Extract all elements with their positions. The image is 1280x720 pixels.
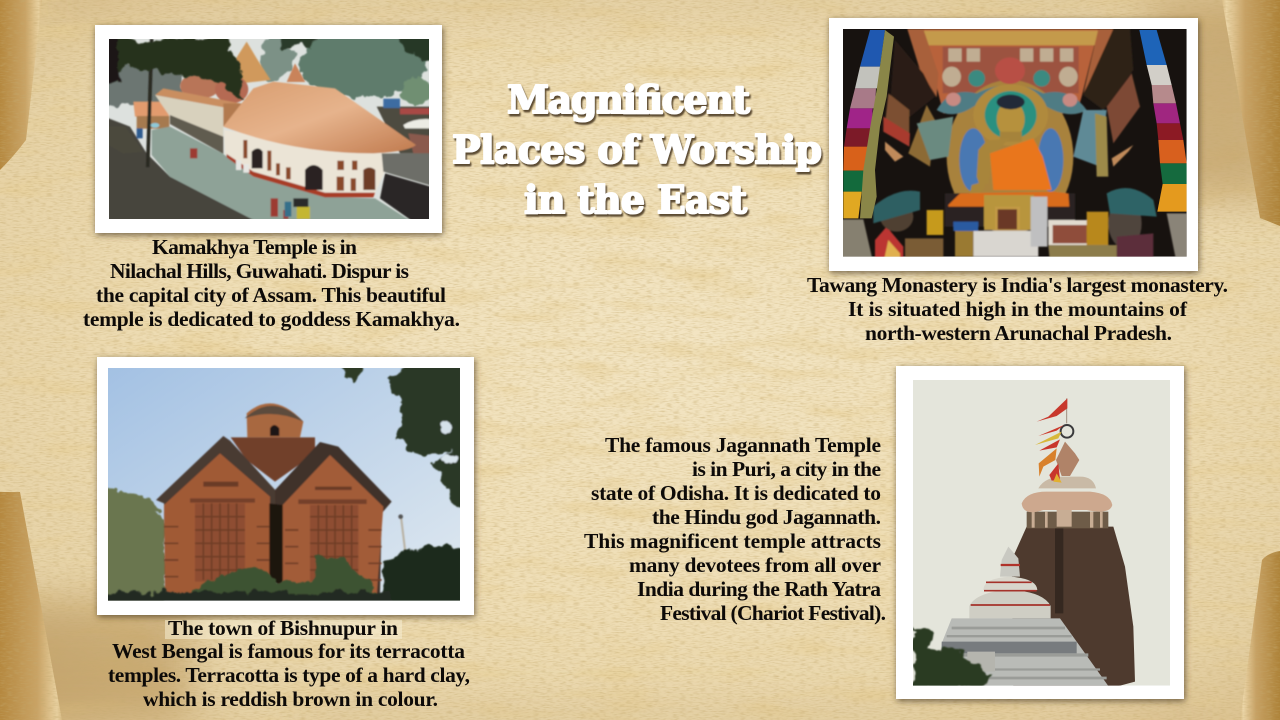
panel: Jagannath Temple <box>584 366 1184 699</box>
scroll curl: top left <box>0 0 42 170</box>
right prayer banner <box>1139 30 1187 212</box>
scroll curl: bottom left <box>0 492 62 720</box>
caption: Jagannath Temple: India during the Rath Yatra <box>637 577 881 601</box>
white temple spire <box>940 547 1110 688</box>
title <box>452 77 822 222</box>
caption: Tawang Monastery: Tawang Monastery is India's largest monastery. <box>807 273 1228 297</box>
photo: Jagannath Temple <box>913 380 1170 688</box>
photo frame: Bishnupur <box>97 357 474 615</box>
caption: Tawang Monastery: It is situated high in the mountains of <box>848 297 1188 321</box>
caption: Jagannath Temple: is in Puri, a city in the <box>692 457 881 481</box>
photo: Bishnupur temple <box>100 363 467 610</box>
caption: Kamakhya Temple: the capital city of Assam. This beautiful <box>96 283 446 307</box>
photo frame: Kamakhya Temple <box>95 25 442 233</box>
scroll curl: bottom right <box>1240 551 1280 720</box>
left prayer banner <box>843 30 894 218</box>
caption: Bishnupur <box>108 616 470 711</box>
title: Magnificent <box>507 77 750 122</box>
caption: Bishnupur: West Bengal is famous for its terracotta <box>112 639 465 663</box>
scroll curl: top right <box>1222 0 1280 226</box>
caption: Jagannath Temple: state of Odisha. It is dedicated to <box>591 481 881 505</box>
photo frame: Jagannath Temple <box>896 366 1184 699</box>
caption: Jagannath Temple: The famous Jagannath Temple <box>605 433 881 457</box>
caption: Bishnupur: temples. Terracotta is type of a hard clay, <box>108 663 470 687</box>
caption: Bishnupur: which is reddish brown in colour. <box>143 687 438 711</box>
caption: Kamakhya Temple: temple is dedicated to goddess Kamakhya. <box>83 307 460 331</box>
caption: Tawang Monastery: north-western Arunachal Pradesh. <box>865 321 1172 345</box>
caption: Jagannath Temple: This magnificent temple attracts <box>584 529 881 553</box>
photo frame: Tawang Monastery <box>829 18 1198 271</box>
caption: Jagannath Temple: the Hindu god Jagannath. <box>652 505 881 529</box>
caption highlight: first line backdrop <box>165 620 402 639</box>
photo: Tawang Monastery <box>837 29 1193 263</box>
caption: Kamakhya Temple <box>83 235 460 331</box>
title: Places of Worship <box>452 127 822 172</box>
caption: Jagannath Temple <box>584 433 886 625</box>
photo: Kamakhya Temple <box>109 39 429 219</box>
panel: Tawang Monastery <box>807 18 1228 345</box>
panel: Kamakhya Temple <box>83 25 460 331</box>
caption: Jagannath Temple: many devotees from all over <box>629 553 881 577</box>
title: in the East <box>524 177 747 222</box>
panel: Bishnupur terracotta temple <box>97 357 474 711</box>
caption: Bishnupur: The town of Bishnupur in <box>168 616 398 640</box>
caption: Tawang Monastery <box>807 273 1228 345</box>
caption: Kamakhya Temple: Kamakhya Temple is in <box>152 235 357 259</box>
caption: Kamakhya Temple: Nilachal Hills, Guwahati. Dispur is <box>110 259 409 283</box>
caption: Jagannath Temple: Festival (Chariot Festival). <box>660 601 886 625</box>
